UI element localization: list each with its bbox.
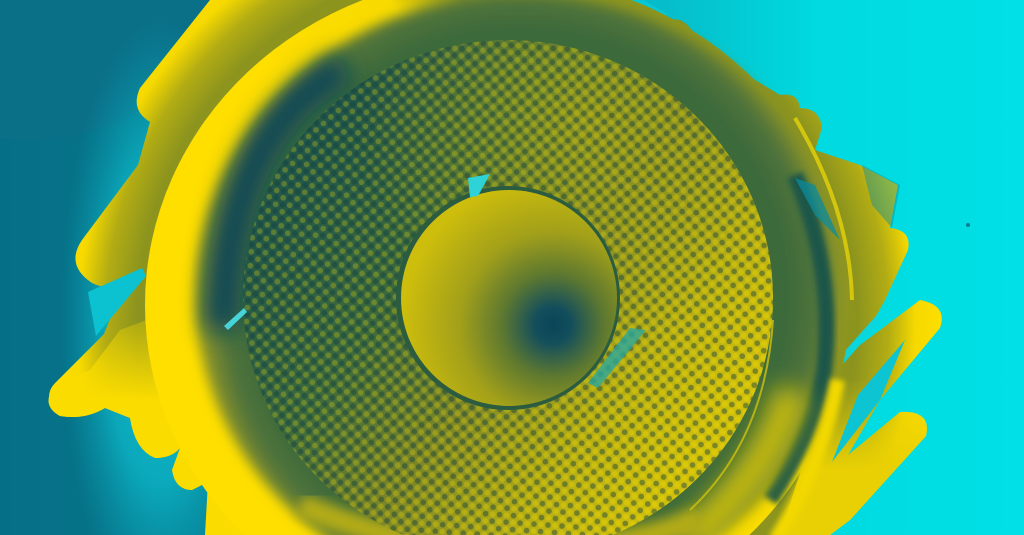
cap rim (396, 186, 620, 410)
gap: bottom flecks (405, 516, 515, 535)
mesh weave (230, 30, 790, 535)
right rim dark band (770, 175, 826, 500)
cyan fleck left (224, 308, 247, 330)
surround inner shadow (195, 0, 845, 535)
background disc top left (142, 0, 210, 61)
gap: right slash (843, 316, 882, 364)
dark left inner band (222, 68, 345, 330)
mesh cone (230, 30, 790, 535)
mesh edge line lower right (690, 320, 773, 510)
gap: right lower wedge (832, 340, 905, 462)
bottom inner band glow (300, 505, 700, 535)
mesh top highlight (380, 40, 719, 240)
gap: left slash (88, 268, 146, 336)
right rim highlight line (795, 118, 852, 300)
cap dome (401, 190, 617, 406)
right speckle patch (795, 165, 900, 240)
mesh tone (230, 30, 790, 535)
spray: lower left yellow wash (48, 320, 244, 535)
lower right rim yellow band (690, 390, 792, 535)
spray: left stroke lower (49, 334, 104, 396)
spray: left body (48, 0, 362, 534)
cyan gaps cut into spray (88, 0, 905, 462)
speaker surround ring (145, 0, 849, 535)
gap: top slashes (420, 0, 485, 34)
cyan halo around speaker (70, 49, 208, 535)
spray: right body (672, 19, 942, 535)
spray: lower right yellow wash (782, 388, 927, 535)
dust cap (396, 186, 620, 410)
cyan fleck lower right of cap (588, 328, 646, 388)
cyan fleck above cap (468, 174, 490, 197)
lower right rim outer yellow (775, 380, 838, 535)
dust speck (966, 223, 970, 227)
